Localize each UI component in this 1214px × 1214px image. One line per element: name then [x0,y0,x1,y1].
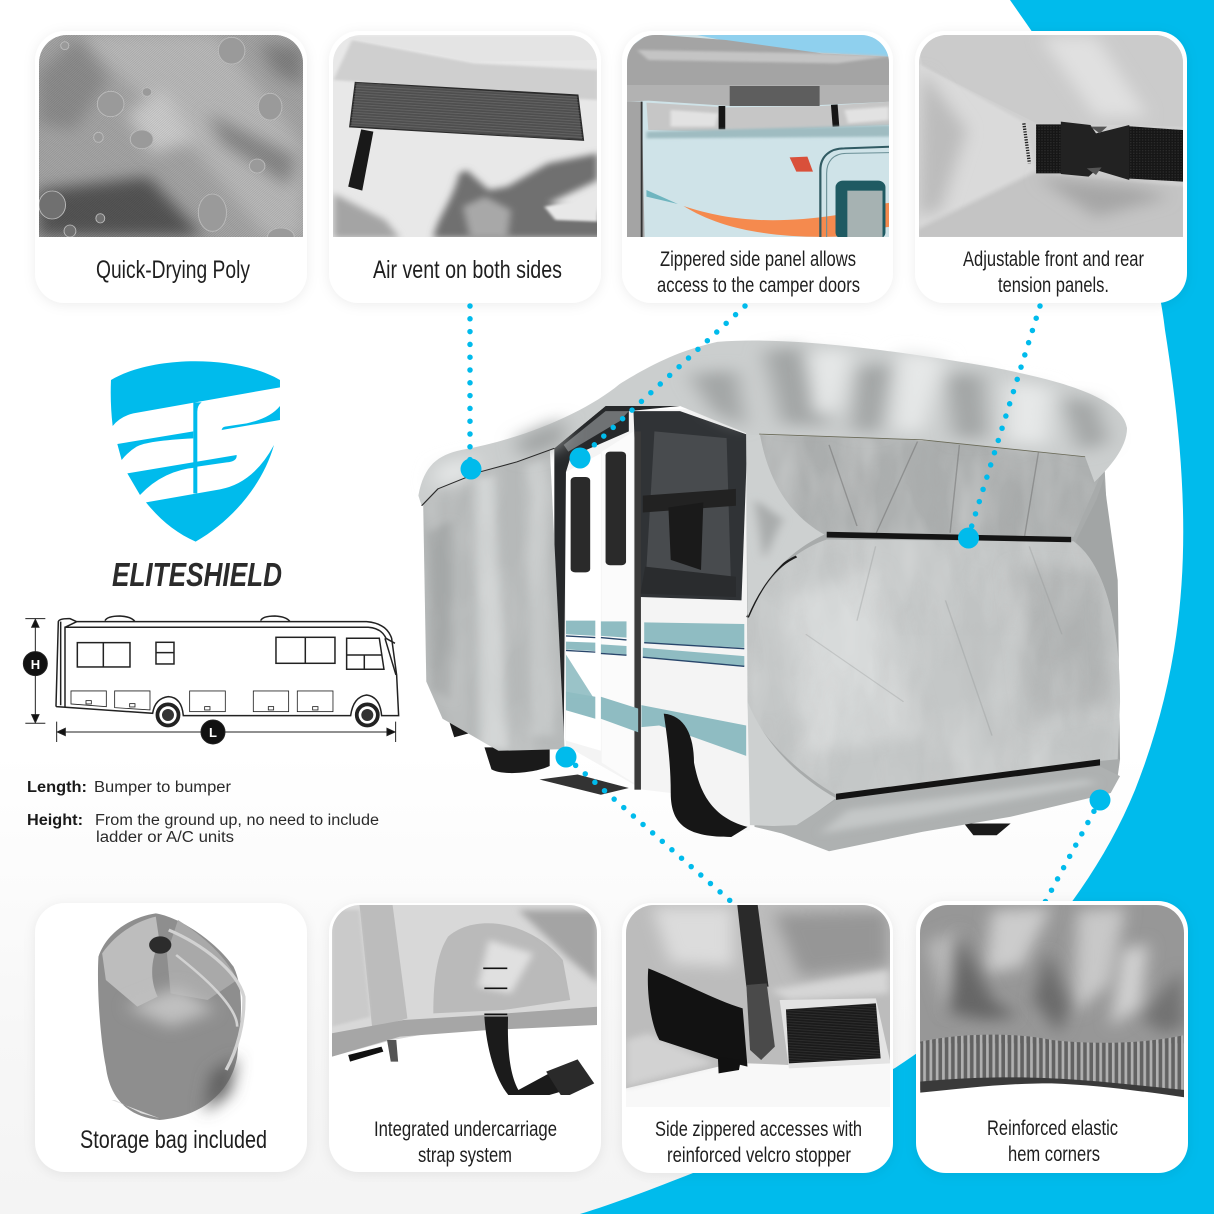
card: quick-drying poly [35,31,307,303]
cover: side sliver [1076,479,1120,759]
navy pinstripes [566,636,744,666]
photo: side panel open over camper [626,33,891,239]
callout markers [460,448,1110,810]
cover: front upper panel [760,435,1096,536]
photo: water droplets on fabric [37,33,306,245]
caption: tension panels. [998,273,1109,297]
caption: strap system [418,1143,512,1167]
brand name: ELITESHIELD [112,556,282,593]
label L: L [209,725,217,740]
caption: Adjustable front and rear [963,247,1144,271]
measurement notes: Bumper to bumper [94,779,231,796]
wheels and undercarriage [447,715,1011,844]
caption [655,1117,862,1167]
caption: Zippered side panel allows [660,247,856,271]
teal stripes [566,621,746,756]
label H: H [31,657,40,672]
cover: rear side panel [419,445,568,752]
blue curved background [580,0,1214,1214]
cover: bottom hem [755,766,1120,851]
photo: storage bag [98,913,244,1120]
cover: silhouette underlay [746,430,1120,830]
main photo: covered motorhome [418,341,1127,851]
side door [566,453,601,751]
photo: strap and buckle [332,903,598,1104]
caption: Quick-Drying Poly [96,256,250,284]
diagram: RV outline with dimensions [23,616,399,744]
caption: Storage bag included [80,1126,267,1154]
dotted leader lines [470,306,1100,906]
caption: Reinforced elastic [987,1116,1118,1140]
card: elastic hem [916,901,1188,1173]
measurement notes: ladder or A/C units [96,829,234,846]
card: zipper and velcro [622,903,893,1173]
caption: Side zippered accesses with [655,1117,862,1141]
card: storage bag [35,903,307,1172]
measurement notes: Length: [27,779,87,796]
straps [827,532,1100,800]
photo: air vent mesh [332,33,607,238]
height arrow [23,619,47,723]
wheels [156,703,379,727]
card: tension panels [915,31,1187,303]
card: air vent [329,31,607,303]
caption: access to the camper doors [657,273,860,297]
cover: roof [418,341,1127,506]
RV body [56,619,399,716]
photo: buckle strap [918,33,1185,240]
card: zippered side panel [622,31,893,303]
measurement notes: From the ground up, no need to include [95,812,379,829]
measurement notes: Height: [27,812,83,829]
caption [963,247,1144,297]
caption: hem corners [1008,1142,1100,1166]
measurement notes [27,779,379,846]
front wheel arch and tyre [664,714,748,837]
logo: EliteShield shield [111,361,280,542]
caption: Integrated undercarriage [374,1117,557,1141]
photo: zipper with velcro stopper [626,905,890,1091]
caption [374,1117,557,1167]
caption: Air vent on both sides [373,256,562,284]
length arrow [57,720,396,744]
cover: front corner wedges [746,430,836,827]
caption [657,247,860,297]
exposed RV body [554,406,750,837]
card: undercarriage strap [329,903,601,1172]
photo: elastic hem [918,903,1187,1097]
cover: front lower panel [745,536,1122,800]
caption: reinforced velcro stopper [667,1143,851,1167]
caption [987,1116,1118,1166]
cab window [633,411,748,600]
